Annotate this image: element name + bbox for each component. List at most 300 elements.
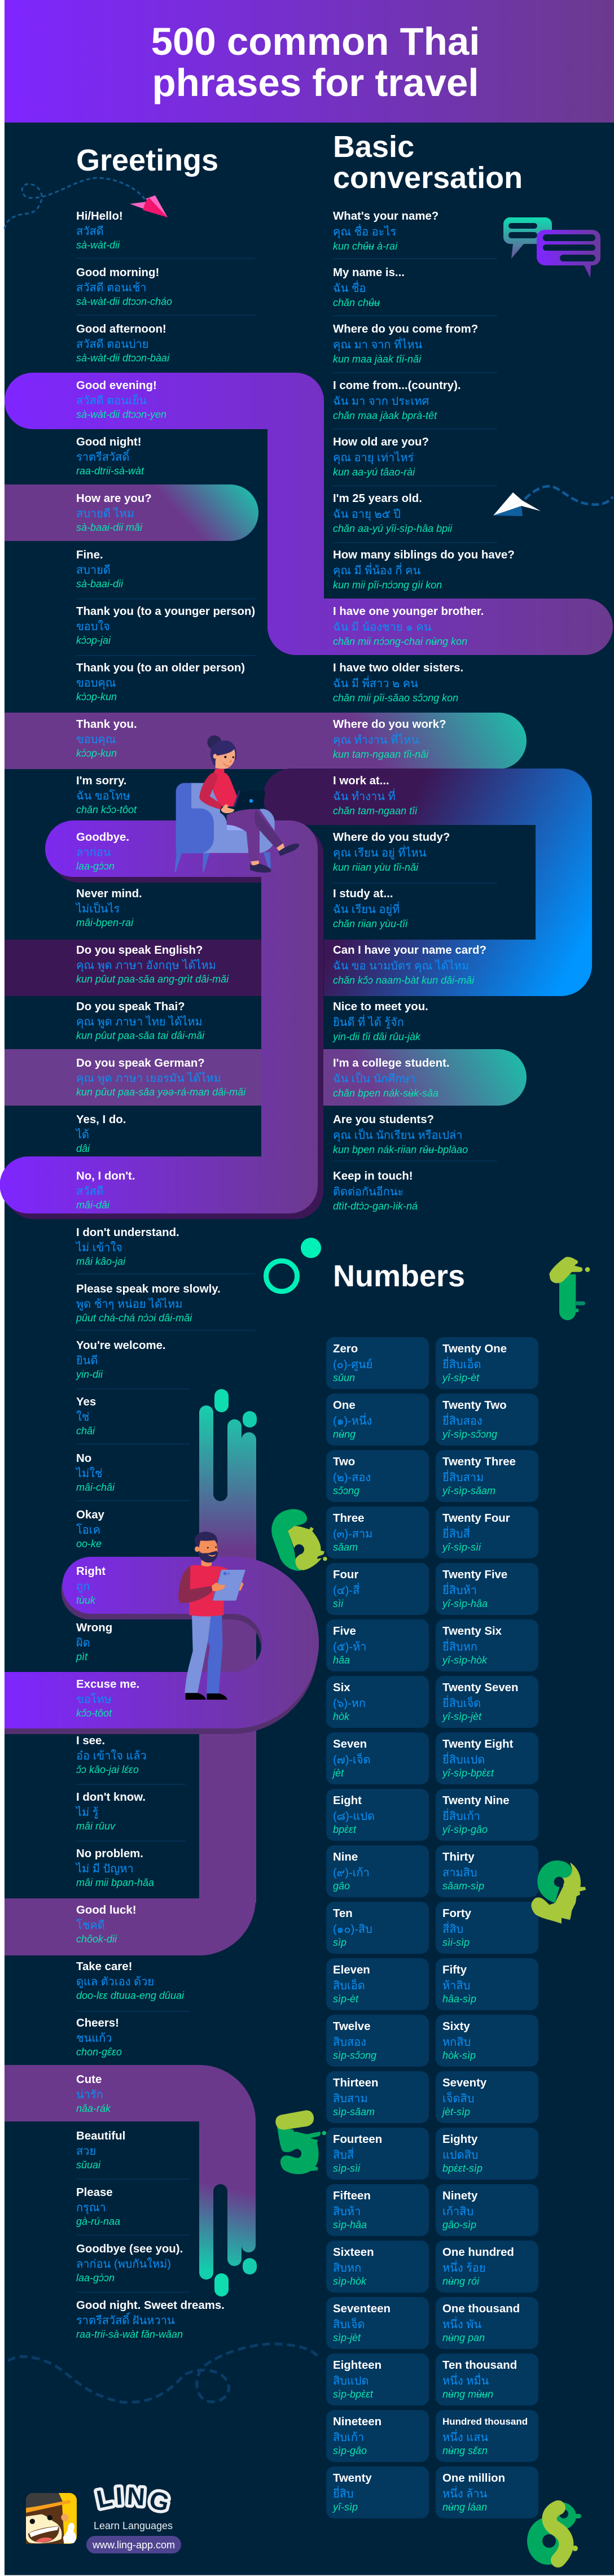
number card: Twenty	[326, 2466, 429, 2518]
phrase: I come from...(country).: chăn maa jàak bprà-têt	[333, 410, 437, 421]
number card: Thirteen: สิบสาม	[333, 2093, 368, 2105]
number card: Twenty Two: Twenty Two	[442, 1399, 507, 1412]
number card: Ninety: Ninety	[442, 2190, 477, 2202]
phrase: You're welcome.: ยินดี	[76, 1355, 98, 1367]
number card: Ten: (๑๐)-สิบ	[333, 1923, 372, 1936]
phrase: How many siblings do you have?	[333, 542, 525, 596]
phrase: I have two older sisters.	[333, 655, 525, 709]
number card: Sixty: หกสิบ	[442, 2036, 471, 2049]
number card: Seven: Seven	[333, 1738, 367, 1750]
number card: One hundred	[436, 2241, 538, 2293]
number card: Twenty Five	[436, 1563, 538, 1615]
phrase: Do you speak German?: คุณ พูด ภาษา เยอรมัน ได้ไหม	[76, 1072, 221, 1085]
dashed flight path: top left	[5, 178, 146, 229]
number card: Twenty Three: ยี่สิบสาม	[442, 1472, 484, 1484]
phrase: Please: Please	[76, 2186, 113, 2199]
number card: Twenty Six: ยี่สิบหก	[442, 1641, 477, 1653]
phrase: Hi/Hello!: สวัสดี	[76, 225, 104, 238]
phrase: Good night. Sweet dreams.	[76, 2299, 225, 2340]
number card: Eighteen: sìp-bpɛ̀ɛt	[333, 2389, 373, 2400]
phrase: How are you?: How are you?	[76, 492, 152, 505]
number card: Thirty: săam-sìp	[442, 1880, 484, 1892]
phrase: My name is...: chăn chʉ̂ʉ	[333, 297, 380, 308]
phrase: Can I have your name card?	[333, 937, 525, 992]
number card: Twenty Four: yî-sìp-sìi	[442, 1542, 481, 1553]
phrase: Yes, I do.: ได้	[76, 1129, 89, 1141]
number card: Fourteen	[326, 2128, 429, 2180]
number card: Six: (๖)-หก	[333, 1697, 366, 1710]
phrase: Right: ถูก	[76, 1580, 90, 1593]
phrase: Nice to meet you.: yin-dii tîi dâi rûu-jàk	[333, 1031, 420, 1042]
phrase: I see.: ɔ̌ɔ kâo-jai lɛ́ɛo	[76, 1764, 139, 1775]
number card: Two	[326, 1450, 429, 1502]
number card: Eighty: แปดสิบ	[442, 2149, 478, 2162]
number card: Sixteen: sìp-hòk	[333, 2276, 366, 2287]
phrase: Are you students?: คุณ เป็น นักเรียน หรือเปล่า	[333, 1129, 463, 1142]
phrase: How old are you?: How old are you?	[333, 436, 429, 448]
number card: Eight	[326, 1789, 429, 1841]
phrase: I'm sorry.	[76, 775, 137, 815]
number card: Twenty: yî-sìp	[333, 2501, 358, 2513]
band: do you speak English	[5, 940, 261, 996]
number card: Hundred thousand: Hundred thousand	[442, 2416, 528, 2427]
phrase: Wrong: Wrong	[76, 1622, 112, 1634]
number card: Two: (๒)-สอง	[333, 1472, 371, 1484]
phrase: I'm sorry.: ฉัน ขอโทษ	[76, 790, 130, 802]
phrase: Thank you (to a younger person): Thank you (to a younger person)	[76, 605, 255, 618]
number card: Seven	[326, 1732, 429, 1784]
phrase: Do you speak English?	[76, 944, 229, 985]
phrase: Thank you (to a younger person)	[76, 605, 255, 646]
phrase: How many siblings do you have?: คุณ มี พี่น้อง กี่ คน	[333, 565, 420, 577]
phrase: Thank you (to a younger person): ขอบใจ	[76, 621, 110, 633]
band: I work at into name card	[263, 769, 592, 996]
phrase: Yes, I do.: dâi	[76, 1143, 90, 1154]
phrase: Do you speak English?: kun pûut paa-săa ang-grìt dâi-măi	[76, 973, 229, 985]
phrase: What's your name?: What's your name?	[333, 210, 438, 222]
number card: Twenty Four	[436, 1507, 538, 1558]
phrase: Right: tùuk	[76, 1595, 95, 1606]
phrase: I have two older sisters.: ฉัน มี พี่สาว ๒ คน	[333, 678, 418, 690]
number card: Twenty Three: yî-sìp-săam	[442, 1485, 495, 1496]
phrase: Thank you.: ขอบคุณ	[76, 733, 116, 746]
number card: One million: One million	[442, 2472, 505, 2485]
phrase: Good night!: Good night!	[76, 436, 142, 448]
number card: Three: săam	[333, 1542, 358, 1553]
phrase: Yes, I do.: Yes, I do.	[76, 1114, 126, 1126]
number card: One million: หนึ่ง ล้าน	[442, 2488, 487, 2500]
band: how are you	[5, 484, 258, 541]
phrase: Good night. Sweet dreams.: ราตรีสวัสดิ์ ฝันหวาน	[76, 2315, 175, 2327]
number card: Seventy: jèt-sìp	[442, 2106, 470, 2117]
number card: Twelve	[326, 2015, 429, 2067]
number card: Ten: sìp	[333, 1937, 347, 1948]
phrase: Are you students?: Are you students?	[333, 1114, 434, 1126]
phrase: I have one younger brother.	[333, 599, 525, 653]
phrase: Good afternoon!: สวัสดี ตอนบ่าย	[76, 338, 149, 351]
phrase: No problem.: No problem.	[76, 1848, 143, 1860]
phrase: Goodbye.: laa-gɔ̀ɔn	[76, 861, 115, 872]
phrase: Goodbye.	[76, 831, 129, 872]
heading: basic conversation	[333, 130, 523, 195]
number card: Eleven	[326, 1958, 429, 2010]
number card: Six: Six	[333, 1682, 350, 1694]
phrase: Fine.: สบายดี	[76, 564, 111, 577]
phrase: Please	[76, 2186, 120, 2227]
number card: Ten	[326, 1902, 429, 1954]
phrase: Beautiful: สวย	[76, 2145, 96, 2158]
number card: Fifteen	[326, 2184, 429, 2236]
number card: Hundred thousand: หนึ่ง แสน	[442, 2431, 488, 2444]
phrase: Hi/Hello!: sà-wàt-dii	[76, 239, 120, 251]
phrase: How are you?: สบายดี ไหม	[76, 508, 134, 520]
phrase: Take care!	[76, 1961, 184, 2001]
number card: Forty: sìi-sìp	[442, 1937, 470, 1948]
logo: monkey app icon	[26, 2493, 77, 2544]
phrase: Excuse me.	[76, 1678, 139, 1719]
phrase: Cheers!: ชนแก้ว	[76, 2032, 112, 2045]
number card: Twenty Six	[436, 1619, 538, 1671]
number card: Sixty: Sixty	[442, 2020, 470, 2033]
title: 500 common Thai	[151, 20, 480, 63]
phrase: No, I don't.: mâi-dâi	[76, 1199, 109, 1211]
number card: Sixty	[436, 2015, 538, 2067]
phrase: Do you speak German?	[76, 1057, 246, 1098]
number card: Eleven: Eleven	[333, 1964, 370, 1976]
phrase: Goodbye (see you).: Goodbye (see you).	[76, 2243, 183, 2255]
number card: Twenty Two	[436, 1394, 538, 1446]
phrase: You're welcome.: You're welcome.	[76, 1339, 166, 1352]
number card: Sixty: hòk-sìp	[442, 2050, 476, 2061]
number card: Ninety	[436, 2184, 538, 2236]
phrase: Never mind.	[76, 888, 142, 928]
number card: Twenty Nine: yî-sìp-gâo	[442, 1824, 488, 1835]
number card: Three: Three	[333, 1512, 365, 1525]
phrase: Never mind.: Never mind.	[76, 888, 142, 900]
phrase: Good morning!	[76, 267, 172, 307]
number card: Five: hâa	[333, 1654, 350, 1666]
phrase: Can I have your name card?: ฉัน ขอ นามบัตร คุณ ได้ไหม	[333, 960, 469, 972]
number card: Ten: Ten	[333, 1907, 353, 1920]
phrase: Excuse me.: kɔ̌ɔ-tôot	[76, 1708, 112, 1719]
number card: Five	[326, 1619, 429, 1671]
number card: Twenty Five: Twenty Five	[442, 1569, 507, 1581]
number card: Nineteen: Nineteen	[333, 2416, 381, 2428]
number card: Twenty Five: yî-sìp-hâa	[442, 1598, 488, 1609]
phrase: My name is...	[333, 260, 525, 314]
number card: One: One	[333, 1399, 356, 1412]
number card: Nine: Nine	[333, 1851, 358, 1863]
number card: Eleven: สิบเอ็ด	[333, 1980, 365, 1992]
number card: Eighteen: สิบแปด	[333, 2375, 369, 2387]
phrase: Never mind.: ไม่เป็นไร	[76, 903, 120, 915]
phrase: Please speak more slowly.: pûut chá-chá nɔ̀ɔi dâi-măi	[76, 1312, 192, 1324]
phrase: Thank you (to an older person): kɔ̀ɔp-kun	[76, 691, 117, 702]
phrase: My name is...: My name is...	[333, 267, 405, 279]
phrase: No, I don't.	[76, 1170, 135, 1211]
band: good evening into younger brother	[5, 373, 613, 655]
phrase: Do you speak English?: คุณ พูด ภาษา อังกฤษ ได้ไหม	[76, 959, 216, 972]
phrase: Right: Right	[76, 1565, 106, 1578]
number card: Eighty	[436, 2128, 538, 2180]
logo: LING wordmark: G	[147, 2486, 172, 2517]
number card: Forty: สี่สิบ	[442, 1923, 463, 1936]
ribbon shadow: right to excuse me	[5, 1562, 318, 1734]
icon: chat bubbles	[503, 217, 600, 278]
phrase: How are you?	[76, 492, 152, 533]
phrase: Good morning!: สวัสดี ตอนเช้า	[76, 282, 147, 294]
phrase: Where do you study?: kun riian yùu tîi-năi	[333, 862, 418, 873]
number card: One thousand: One thousand	[442, 2303, 520, 2315]
phrase: Okay: โอเค	[76, 1524, 100, 1536]
phrase: Where do you come from?: Where do you come from?	[333, 323, 478, 335]
number card: Zero: (๐)-ศูนย์	[333, 1359, 372, 1371]
number card: Thirty: สามสิบ	[442, 1867, 477, 1879]
number card: Thirteen: sìp-săam	[333, 2106, 375, 2117]
phrase: No	[76, 1452, 115, 1493]
phrase: Do you speak English?: Do you speak English?	[76, 944, 203, 957]
logo tagline: Learn Languages	[94, 2520, 173, 2531]
phrase: I work at...: I work at...	[333, 775, 389, 787]
phrase: I'm 25 years old.: chăn aa-yú yîi-sìp-hâa bpii	[333, 523, 452, 534]
logo: LING wordmark: L	[94, 2483, 115, 2514]
number card: Forty: Forty	[442, 1907, 471, 1920]
upper drip pill one	[214, 1389, 229, 1412]
number card: Nine: gâo	[333, 1880, 350, 1892]
phrase: Good morning!: sà-wàt-dii dtɔɔn-cháo	[76, 296, 172, 307]
header banner	[5, 0, 614, 123]
phrase: I don't know.	[76, 1791, 146, 1832]
phrase: Hi/Hello!: Hi/Hello!	[76, 210, 123, 222]
phrase: How old are you?: คุณ อายุ เท่าไหร่	[333, 452, 414, 464]
phrase: What's your name?: kun chʉ̂ʉ à-rai	[333, 241, 397, 252]
number card: Nine	[326, 1845, 429, 1897]
phrase: I don't understand.: ไม่ เข้าใจ	[76, 1242, 122, 1254]
phrase: Never mind.: mâi-bpen-rai	[76, 917, 133, 928]
heading: basic conversation: conversation	[333, 161, 523, 195]
phrase: Good evening!: Good evening!	[76, 379, 157, 392]
number card: Twenty Six: yî-sìp-hòk	[442, 1654, 487, 1666]
phrase: Keep in touch!: ติดต่อกันอีกนะ	[333, 1186, 404, 1198]
number card: Twenty Two: yî-sìp-sɔ̌ɔng	[442, 1429, 497, 1440]
phrase: Keep in touch!: dtìt-dtɔ̀ɔ-gan-ìik-ná	[333, 1200, 418, 1212]
phrase: I study at...: ฉัน เรียน อยู่ที่	[333, 903, 400, 916]
phrase: No: No	[76, 1452, 91, 1465]
phrase: I work at...: ฉัน ทำงาน ที่	[333, 791, 396, 803]
dashed flight path: bottom	[8, 2344, 319, 2402]
band: good luck	[5, 1736, 256, 1955]
phrase: Good afternoon!: sà-wàt-dii dtɔɔn-bàai	[76, 352, 169, 364]
phrase: I'm a college student.: I'm a college student.	[333, 1057, 450, 1069]
number card: Eighteen: Eighteen	[333, 2359, 381, 2372]
number card: Seventy: เจ็ดสิบ	[442, 2093, 474, 2105]
number card: Thirty: Thirty	[442, 1851, 475, 1863]
number card: Twenty Two: ยี่สิบสอง	[442, 1415, 483, 1427]
number card: Twenty Eight: yî-sìp-bpɛ̀ɛt	[442, 1767, 494, 1779]
phrase: Good luck!: โชคดี	[76, 1919, 105, 1932]
phrase: Do you speak German?: kun pûut paa-săa yəə-rá-man dâi-măi	[76, 1086, 245, 1098]
phrase: Nice to meet you.: ยินดี ที่ ได้ รู้จัก	[333, 1016, 404, 1029]
number card: Seventeen: sìp-jèt	[333, 2332, 361, 2343]
number card: One thousand	[436, 2297, 538, 2349]
number card: Twelve: Twelve	[333, 2020, 370, 2033]
phrase: Wrong	[76, 1622, 112, 1662]
phrase: Where do you come from?	[333, 316, 525, 370]
number card: Seventeen: สิบเจ็ด	[333, 2319, 365, 2331]
ribbon: right to excuse me	[5, 1557, 319, 1728]
phrase: Beautiful: Beautiful	[76, 2130, 125, 2142]
phrase: Good night. Sweet dreams.: Good night. Sweet dreams.	[76, 2299, 225, 2312]
illustration: woman on armchair	[174, 735, 299, 872]
phrase: Right	[76, 1565, 106, 1606]
phrase: Cheers!: Cheers!	[76, 2017, 119, 2029]
phrase: Goodbye.: ลาก่อน	[76, 846, 111, 859]
lower drip pill two	[243, 2258, 257, 2274]
icon: pink paper plane	[130, 195, 168, 217]
phrase: No, I don't.: No, I don't.	[76, 1170, 135, 1182]
phrase: Excuse me.: ขอโทษ	[76, 1693, 112, 1706]
phrase: Thank you (to an older person): Thank you (to an older person)	[76, 662, 245, 674]
phrase: I have one younger brother.: chăn mii nɔ́ɔng-chai nʉ̀ng kon	[333, 636, 467, 647]
number card: Four: Four	[333, 1569, 358, 1581]
number card: Twenty One	[436, 1337, 538, 1389]
number card: Five: Five	[333, 1625, 356, 1638]
number card: Ten thousand: หนึ่ง หมื่น	[442, 2375, 489, 2387]
number card: Twenty One: yî-sìp-èt	[442, 1372, 479, 1383]
phrase: Please speak more slowly.	[76, 1283, 221, 1324]
phrase: Please: กรุณา	[76, 2202, 106, 2214]
phrase: I come from...(country).: I come from...(country).	[333, 379, 461, 392]
number card: One hundred: One hundred	[442, 2246, 514, 2259]
phrase: Fine.	[76, 549, 123, 590]
phrase: I study at...	[333, 881, 525, 935]
phrase: Good night!	[76, 436, 144, 477]
number card: Forty	[436, 1902, 538, 1954]
phrase: I'm a college student.: chăn bpen nák-sʉ̀k-săa	[333, 1088, 438, 1099]
phrase: Okay	[76, 1509, 104, 1549]
phrase: What's your name?: คุณ ชื่อ อะไร	[333, 226, 396, 238]
number card: Ninety: gâo-sìp	[442, 2219, 476, 2230]
phrase: Excuse me.: Excuse me.	[76, 1678, 139, 1691]
phrase: Nice to meet you.: Nice to meet you.	[333, 1001, 428, 1013]
phrase: Do you speak Thai?: Do you speak Thai?	[76, 1001, 185, 1013]
phrase: Cute: น่ารัก	[76, 2089, 103, 2101]
phrase: No: mâi-châi	[76, 1482, 115, 1493]
number card: Twenty Seven: yî-sìp-jèt	[442, 1711, 481, 1722]
band: college student	[322, 1049, 527, 1106]
character: number 8	[527, 2502, 581, 2565]
number card: Ten thousand: Ten thousand	[442, 2359, 517, 2372]
phrase: Cute	[76, 2073, 111, 2114]
number card: Twenty Six: Twenty Six	[442, 1625, 502, 1638]
number card: Ten thousand: nʉ̀ng mʉ̀ʉn	[442, 2389, 493, 2400]
phrase: I don't understand.: I don't understand.	[76, 1226, 179, 1239]
phrase: Where do you come from?: คุณ มา จาก ที่ไหน	[333, 339, 422, 351]
icon: white paper plane	[493, 492, 541, 516]
phrase: Wrong: pìt	[76, 1651, 87, 1662]
band: do you speak German	[5, 1049, 261, 1106]
number card: Four: sìi	[333, 1598, 343, 1609]
number card: Twenty Five: ยี่สิบห้า	[442, 1584, 477, 1597]
phrase: Yes: châi	[76, 1425, 95, 1437]
phrase: Please: gà-rú-naa	[76, 2216, 120, 2227]
number card: Eighteen	[326, 2354, 429, 2405]
phrase: Good luck!: Good luck!	[76, 1904, 136, 1916]
phrase: How are you?: sà-baai-dii măi	[76, 522, 142, 533]
number card: Twenty Four: ยี่สิบสี่	[442, 1528, 470, 1540]
number card: Fifty: ห้าสิบ	[442, 1980, 470, 1992]
phrase: Take care!: Take care!	[76, 1961, 132, 1973]
phrase: I see.: อ๋อ เข้าใจ แล้ว	[76, 1750, 147, 1762]
logo website pill	[86, 2536, 181, 2553]
number card: Five: (๕)-ห้า	[333, 1641, 367, 1653]
phrase: Fine.: Fine.	[76, 549, 103, 561]
phrase: What's your name?	[333, 203, 525, 257]
number card: Three	[326, 1507, 429, 1558]
phrase: No problem.: mâi mii bpan-hăa	[76, 1877, 154, 1888]
number card: Sixteen: Sixteen	[333, 2246, 374, 2259]
heading: greetings: Greetings	[76, 143, 218, 177]
number card: Fourteen: Fourteen	[333, 2133, 382, 2146]
phrase: Good morning!: Good morning!	[76, 267, 159, 279]
number card: Fifteen: สิบห้า	[333, 2206, 361, 2218]
number card: Thirteen: Thirteen	[333, 2077, 378, 2089]
number card: Thirty	[436, 1845, 538, 1897]
number card: Six: hòk	[333, 1711, 349, 1722]
phrase: I'm sorry.: chăn kɔ̌ɔ-tôot	[76, 804, 137, 815]
number card: One hundred: nʉ̀ng rói	[442, 2276, 479, 2287]
phrase: Take care!: ดูแล ตัวเอง ด้วย	[76, 1976, 154, 1988]
phrase: No problem.	[76, 1848, 154, 1888]
phrase: Goodbye (see you).	[76, 2243, 183, 2284]
phrase: I'm a college student.: ฉัน เป็น นักศึกษา	[333, 1073, 416, 1085]
number card: Eighty: bpɛ̀ɛt-sìp	[442, 2163, 483, 2174]
phrase: I don't understand.: mâi kâo-jai	[76, 1256, 125, 1267]
phrase: No problem.: ไม่ มี ปัญหา	[76, 1863, 134, 1875]
phrase: I'm 25 years old.: ฉัน อายุ ๒๕ ปี	[333, 508, 401, 521]
character: number 5	[275, 2110, 326, 2174]
phrase: Thank you.: Thank you.	[76, 718, 137, 731]
phrase: Keep in touch!	[333, 1163, 525, 1217]
number card: Hundred thousand	[436, 2410, 538, 2462]
phrase: I have one younger brother.: I have one younger brother.	[333, 605, 484, 618]
number card: Twenty Three	[436, 1450, 538, 1502]
number card: Twenty: Twenty	[333, 2472, 372, 2485]
phrase: I come from...(country).	[333, 373, 525, 427]
phrase: Goodbye (see you).: ลาก่อน (พบกันใหม่)	[76, 2258, 171, 2271]
phrase: How many siblings do you have?: How many siblings do you have?	[333, 549, 515, 561]
phrase: Thank you (to an older person)	[76, 662, 245, 702]
phrase: How many siblings do you have?: kun mii pîi-nɔ́ɔng gìi kon	[333, 579, 442, 591]
upper drip column	[199, 1405, 256, 1903]
phrase: Cheers!	[76, 2017, 122, 2058]
phrase: You're welcome.	[76, 1339, 166, 1380]
phrase: Thank you (to an older person): ขอบคุณ	[76, 677, 116, 689]
number card: One: (๑)-หนึ่ง	[333, 1415, 372, 1427]
number card: Seventy: Seventy	[442, 2077, 486, 2089]
number card: Fifteen: sìp-hâa	[333, 2219, 367, 2230]
number card: Zero	[326, 1337, 429, 1389]
number card: Sixteen	[326, 2241, 429, 2293]
phrase: Wrong: ผิด	[76, 1637, 90, 1649]
number card: Twenty Four: Twenty Four	[442, 1512, 510, 1525]
number card: Seventeen: Seventeen	[333, 2303, 391, 2315]
phrase: Where do you study?	[333, 824, 525, 879]
phrase: I'm 25 years old.	[333, 486, 525, 540]
phrase: Good luck!: chôok-dii	[76, 1933, 117, 1945]
number card: Two: sɔ̌ɔng	[333, 1485, 359, 1496]
phrase: Good afternoon!	[76, 323, 169, 364]
